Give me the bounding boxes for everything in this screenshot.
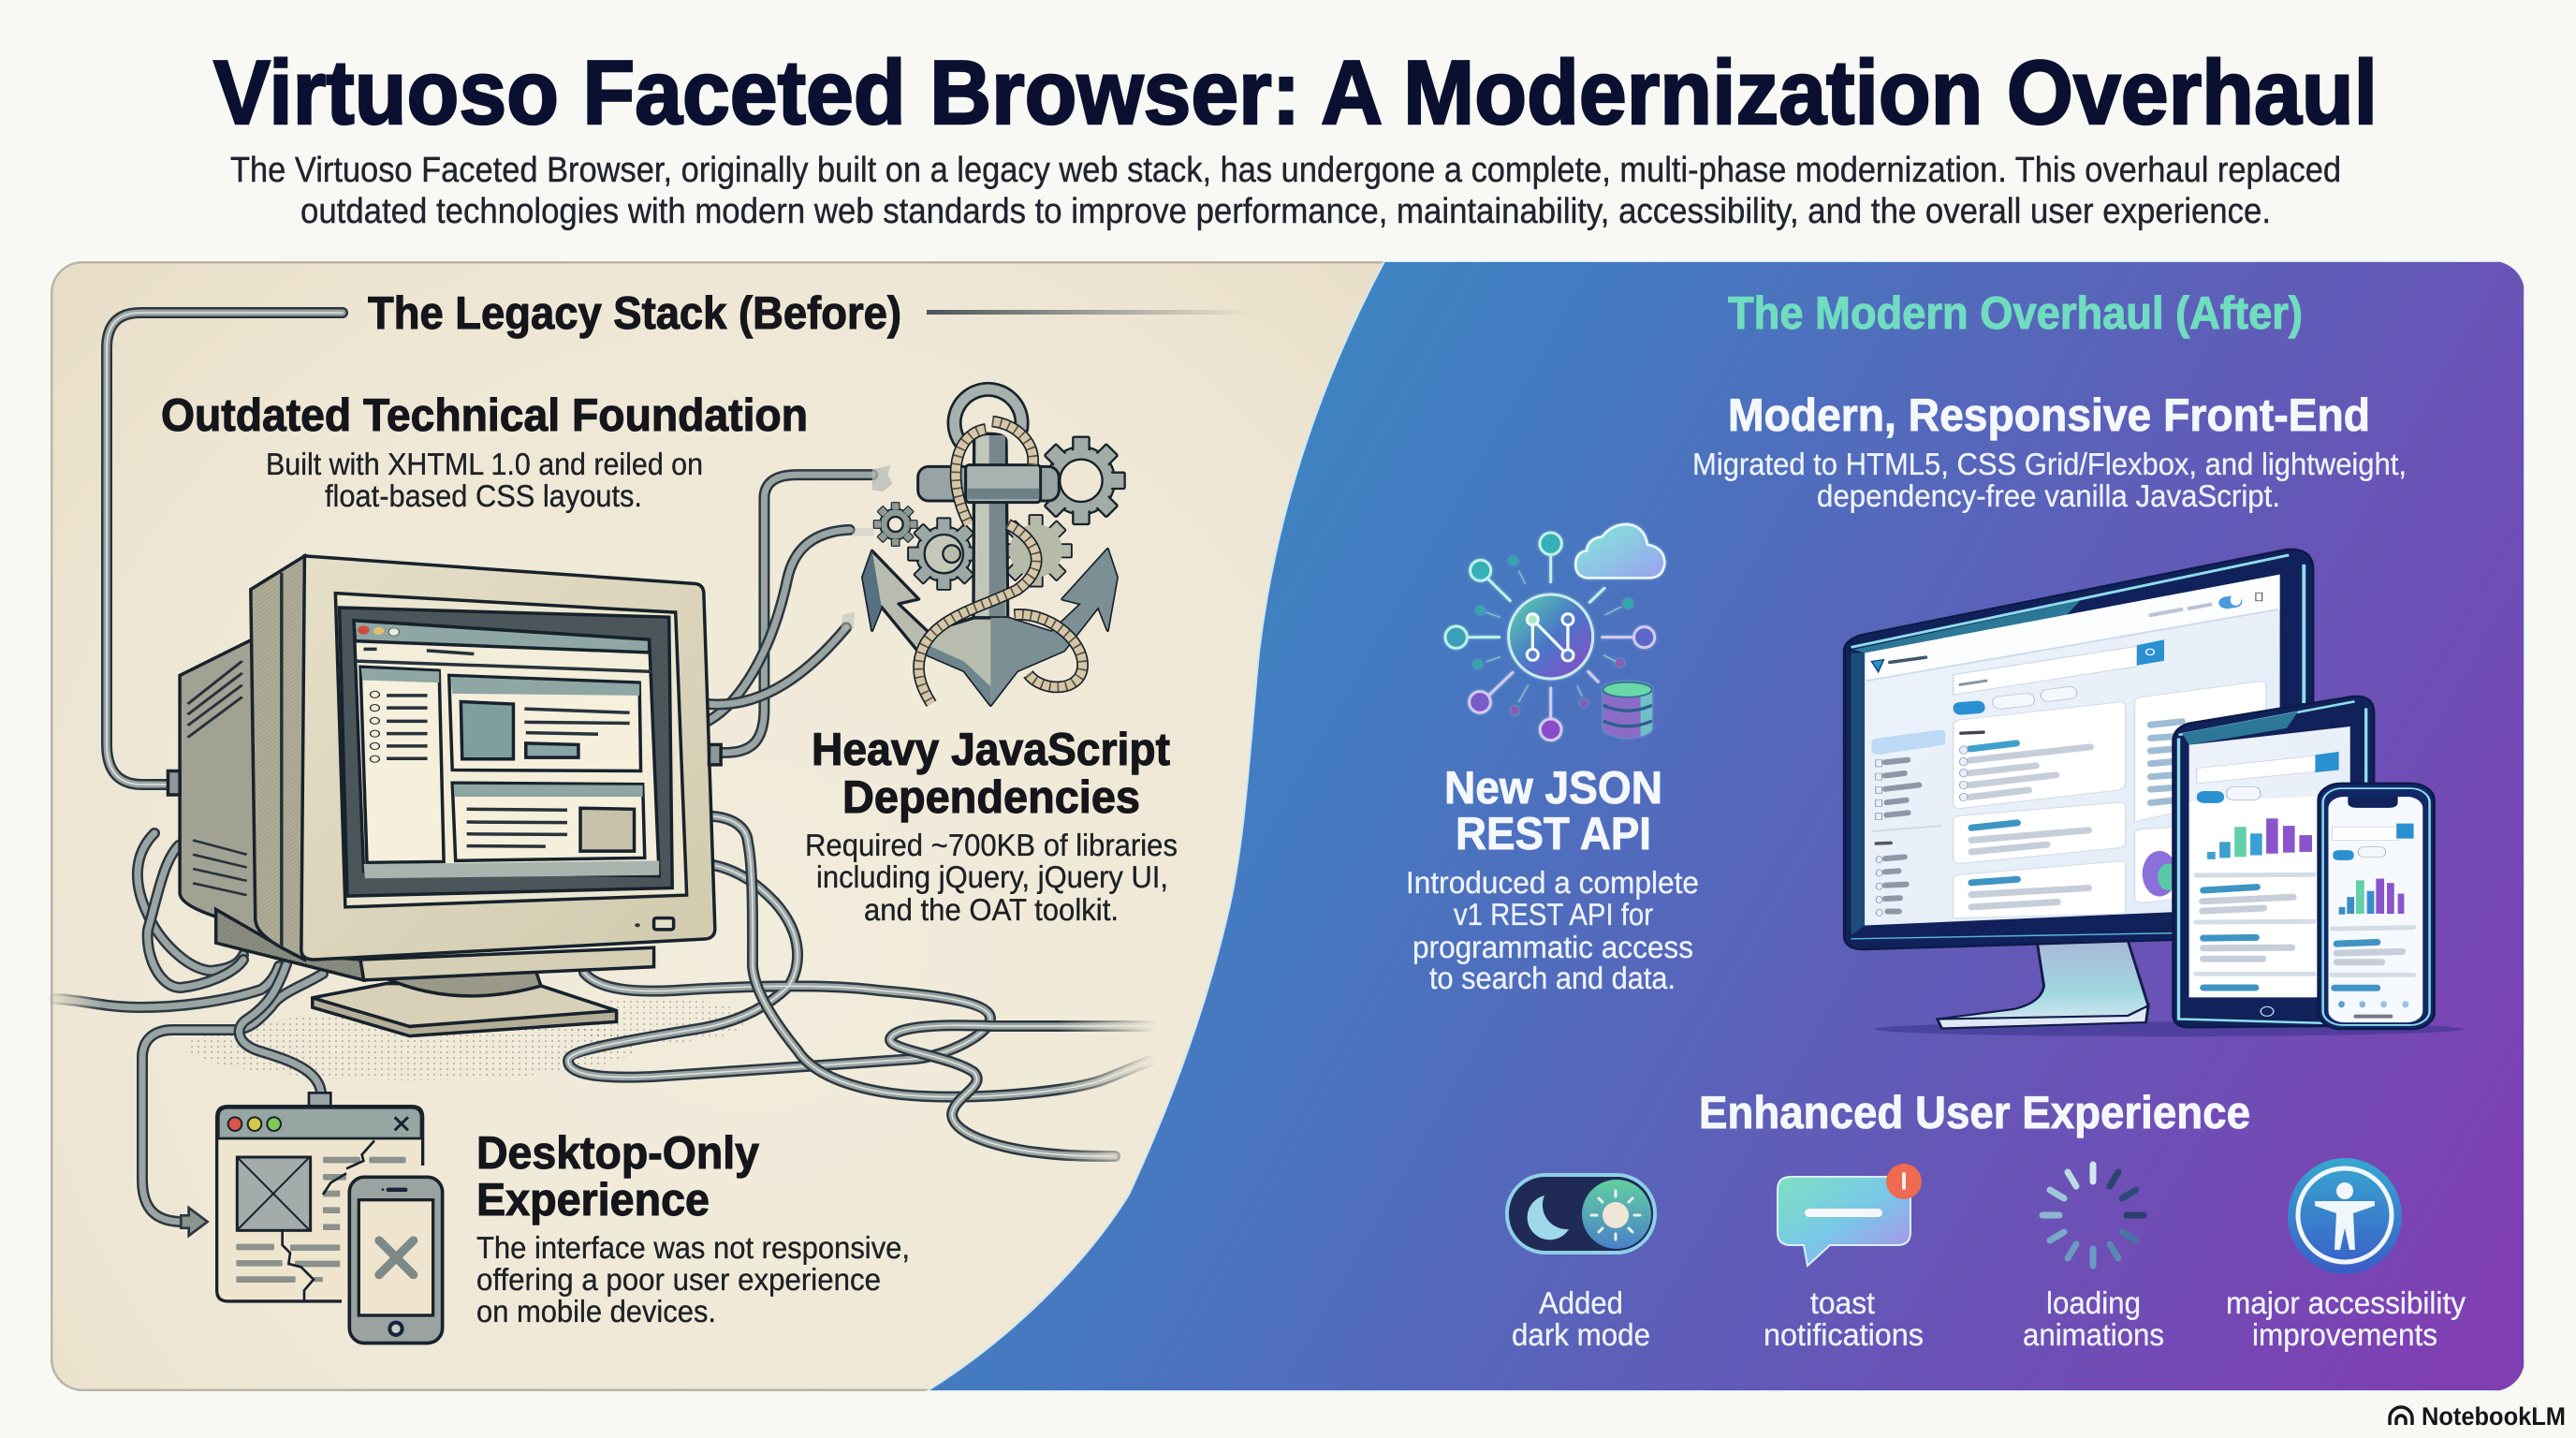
arrow into window xyxy=(181,1208,208,1236)
monitor base xyxy=(313,947,654,1036)
label: Added xyxy=(1539,1285,1623,1320)
label: notifications xyxy=(1764,1317,1924,1352)
floor shadow stipple xyxy=(187,998,749,1080)
section: modern responsive front-end: Migrated to HTML5, CSS Grid/Flexbox, and lightweight, xyxy=(1692,447,2407,481)
section: new JSON REST API: programmatic access xyxy=(1412,930,1693,964)
result cards xyxy=(1954,702,2126,809)
cable connector xyxy=(309,1093,330,1106)
feature: toast notifications xyxy=(1764,1164,1924,1352)
icon: dark mode toggle xyxy=(1507,1175,1655,1253)
monitor casing xyxy=(180,556,715,980)
connector lines and nodes xyxy=(1445,533,1655,741)
filter chips xyxy=(1953,700,1985,715)
phone xyxy=(2319,784,2434,1029)
cloud xyxy=(1575,524,1664,578)
section: heavy javascript dependencies: Required ~700KB of libraries xyxy=(805,828,1178,862)
cable: heading to monitor xyxy=(107,313,343,785)
intro paragraph: outdated technologies with modern web standards to improve performance, maintainability, accessibility, and the overall user experience. xyxy=(300,192,2271,231)
section: modern responsive front-end: dependency-free vanilla JavaScript. xyxy=(1817,478,2280,513)
feature: dark mode xyxy=(1507,1175,1655,1352)
icon: toast bubble xyxy=(1778,1164,1922,1266)
heading: the modern overhaul: The Modern Overhaul (After) xyxy=(1728,288,2303,339)
section: outdated technical foundation: float-based CSS layouts. xyxy=(325,478,642,513)
title: Virtuoso Faceted Browser: A Modernization Overhaul xyxy=(213,41,2378,143)
power button xyxy=(635,918,674,930)
desktop monitor xyxy=(1844,550,2313,949)
sidebar xyxy=(1871,730,1945,755)
label: animations xyxy=(2023,1317,2164,1352)
browser window xyxy=(217,1107,423,1301)
top bar xyxy=(1865,575,2280,681)
section: outdated technical foundation xyxy=(161,390,808,513)
phone with X xyxy=(349,1177,443,1343)
section: modern responsive front-end xyxy=(1692,390,2407,513)
label xyxy=(2226,1285,2466,1352)
section: new JSON REST API: to search and data. xyxy=(1429,961,1676,995)
section: outdated technical foundation: Outdated Technical Foundation xyxy=(161,390,808,441)
section: desktop-only experience: The interface was not responsive, xyxy=(476,1230,910,1265)
monitor stand xyxy=(1938,941,2148,1029)
heading: the legacy stack: The Legacy Stack (Before) xyxy=(368,288,901,339)
section: heavy javascript dependencies: Dependencies xyxy=(842,772,1140,823)
heading: enhanced user experience: Enhanced User Experience xyxy=(1699,1088,2250,1138)
anchor body xyxy=(863,433,1117,705)
gears xyxy=(873,437,1125,590)
tangled cables xyxy=(54,816,1151,1222)
intro paragraph: The Virtuoso Faceted Browser, originally built on a legacy web stack, has undergone a complete, multi-phase modernization. This overhaul replaced xyxy=(230,151,2341,190)
label: toast xyxy=(1810,1285,1875,1320)
section: heavy javascript dependencies: Heavy JavaScript xyxy=(812,725,1170,775)
monitor connectors xyxy=(168,744,721,795)
section: desktop-only experience xyxy=(476,1128,910,1328)
main comparison panel background xyxy=(51,261,2525,1391)
feature: accessibility xyxy=(2226,1158,2466,1352)
section: desktop-only experience: Experience xyxy=(476,1175,710,1225)
label: loading xyxy=(2046,1285,2141,1320)
label: improvements xyxy=(2252,1317,2437,1352)
icon: REST API network hub xyxy=(1445,524,1664,741)
rope xyxy=(918,421,1083,704)
section: heavy javascript dependencies: including jQuery, jQuery UI, xyxy=(816,859,1168,894)
section: heavy javascript dependencies xyxy=(805,725,1178,927)
screen bezel xyxy=(335,594,687,907)
icon: responsive devices xyxy=(1844,550,2464,1036)
hub with N xyxy=(1509,594,1593,679)
section: new JSON REST API xyxy=(1406,763,1699,995)
heading right rule xyxy=(927,310,1250,315)
search bar xyxy=(1954,646,2137,695)
panel: the modern overhaul xyxy=(1406,288,2466,1352)
icon: loading spinner xyxy=(2042,1165,2144,1266)
section: new JSON REST API: REST API xyxy=(1456,809,1651,859)
label: major accessibility xyxy=(2226,1285,2466,1320)
section: desktop-only experience: offering a poor user experience xyxy=(476,1262,881,1297)
database xyxy=(1603,682,1652,738)
section: new JSON REST API: Introduced a complete xyxy=(1406,865,1699,900)
icon: anchor with gears and rope xyxy=(841,389,1125,705)
label: dark mode xyxy=(1512,1317,1650,1352)
section: outdated technical foundation: Built with XHTML 1.0 and reiled on xyxy=(266,447,703,481)
frayed cable ends xyxy=(841,465,892,630)
NotebookLM logo: NotebookLM xyxy=(2422,1402,2566,1431)
tablet xyxy=(2174,697,2374,1027)
anchor ring xyxy=(955,389,1022,443)
label xyxy=(2023,1285,2164,1352)
icon: CRT monitor xyxy=(168,556,721,1036)
panel: the legacy stack xyxy=(54,288,1250,1343)
section: enhanced user experience xyxy=(1507,1088,2466,1352)
intro paragraph xyxy=(230,151,2341,231)
icon: accessibility figure xyxy=(2288,1158,2402,1274)
feature: loading animations xyxy=(2023,1165,2164,1352)
section: heavy javascript dependencies: and the OAT toolkit. xyxy=(864,892,1119,927)
browser window on CRT xyxy=(354,621,659,878)
section: desktop-only experience: on mobile devices. xyxy=(476,1294,716,1328)
ground shadow xyxy=(1874,1021,2464,1036)
section: modern responsive front-end: Modern, Responsive Front-End xyxy=(1728,390,2370,441)
cables to anchor xyxy=(709,475,872,753)
label xyxy=(1512,1285,1650,1352)
section: desktop-only experience: Desktop-Only xyxy=(476,1128,759,1179)
section: new JSON REST API: v1 REST API for xyxy=(1454,897,1653,932)
vent lines xyxy=(188,661,247,895)
section: new JSON REST API: New JSON xyxy=(1444,763,1662,814)
label xyxy=(1764,1285,1924,1352)
icon: broken browser window and phone xyxy=(181,1093,443,1343)
